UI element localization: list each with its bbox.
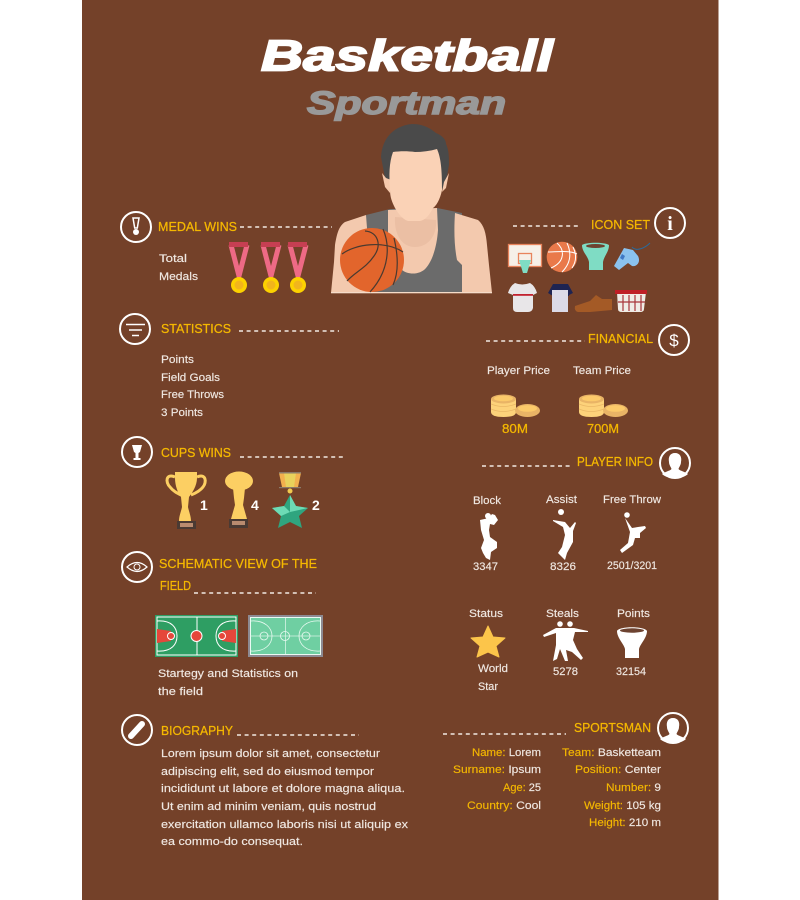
- background panel: [82, 0, 718, 900]
- stat: steals: Steals: [546, 608, 580, 620]
- details: personal: Country: Cool: [467, 800, 541, 812]
- details: team: [562, 747, 661, 829]
- stat: steals: [543, 608, 588, 678]
- icon: whistle: [614, 243, 650, 270]
- text block: lorem ipsum: incididunt ut labore et dolore magna aliqua.: [161, 783, 405, 795]
- icon: medal badge: [121, 212, 151, 242]
- heading: schematic view: SCHEMATIC VIEW OF THE: [159, 557, 317, 571]
- panel: player info: [469, 448, 690, 693]
- panel: statistics: [120, 314, 339, 419]
- values: prices: 700M: [587, 421, 619, 436]
- title: Basketball: [261, 32, 554, 80]
- values: prices: [502, 421, 619, 436]
- text block: lorem ipsum: adipiscing elit, sed do eiusmod tempor: [161, 766, 374, 778]
- panel: medal wins: [121, 212, 332, 293]
- icon: star medal: [272, 472, 308, 528]
- stat: status: Status: [469, 608, 504, 620]
- list: statistics: [161, 354, 225, 419]
- heading: biography: BIOGRAPHY: [161, 724, 234, 738]
- details: team: Height: 210 m: [589, 817, 661, 829]
- icon: coins: [491, 394, 628, 417]
- list: statistics: Free Throws: [161, 389, 225, 401]
- stat: points: 32154: [616, 666, 646, 678]
- stat: block: [473, 495, 502, 573]
- stat: status: World: [478, 663, 508, 675]
- values: prices: 80M: [502, 421, 528, 436]
- stat: points: Points: [617, 608, 651, 620]
- text block: lorem ipsum: Lorem ipsum dolor sit amet, consectetur: [161, 748, 380, 760]
- list: statistics: Field Goals: [161, 372, 221, 384]
- icon: basketball: [547, 242, 577, 272]
- icon: three medals: [229, 242, 307, 293]
- details: team: Team: Basketteam: [562, 747, 661, 759]
- stat: assist: 8326: [550, 561, 576, 573]
- icon: dollar badge: $: [669, 331, 679, 350]
- stat: status: [469, 608, 508, 693]
- text block: lorem ipsum: exercitation ullamco laboris nisi ut aliquip ex: [161, 819, 409, 831]
- heading: cups wins: CUPS WINS: [161, 446, 231, 460]
- panel: financial: [486, 325, 689, 436]
- text: cup count 1: 1: [200, 497, 208, 513]
- text: cup count 4: 4: [251, 497, 259, 513]
- text block: lorem ipsum: ea commo-do consequat.: [161, 836, 303, 848]
- label: total medals: Total: [159, 253, 187, 265]
- details: team: Position: Center: [575, 764, 661, 776]
- icon: basket: [615, 290, 647, 312]
- title: Sportman: [307, 85, 506, 121]
- panel: icon set: [508, 208, 685, 312]
- stat: status: Star: [478, 681, 498, 693]
- player illustration: [331, 124, 492, 293]
- panel: biography: [122, 715, 409, 848]
- icon: sportsman badge: [658, 713, 688, 743]
- stat: assist: Assist: [546, 494, 577, 506]
- heading: sportsman: SPORTSMAN: [574, 721, 651, 735]
- stat: points: [616, 608, 651, 678]
- icon: trophy badge: [122, 437, 152, 467]
- text block: lorem ipsum: [161, 748, 409, 848]
- diagram: pale court: [248, 615, 323, 657]
- label: total medals: Medals: [159, 271, 199, 283]
- icon: navy shirt: [548, 284, 573, 312]
- stat: free throw: [603, 494, 661, 572]
- icon: net: [582, 243, 609, 270]
- caption: strategy: [158, 668, 298, 698]
- panel: sportsman: [443, 713, 688, 829]
- details: personal: Age: 25: [503, 782, 541, 794]
- labels: prices: Team Price: [573, 365, 631, 377]
- details: team: Number: 9: [606, 782, 661, 794]
- details: team: Weight: 105 kg: [584, 800, 661, 812]
- icon: white jersey: [508, 283, 537, 312]
- stat: assist: [546, 494, 577, 573]
- stat: steals: 5278: [553, 666, 578, 678]
- icon: filter badge: [120, 314, 150, 344]
- details: personal: Name: Lorem: [472, 747, 541, 759]
- icon: gold cup: [167, 472, 205, 529]
- diagram: green court: [155, 615, 238, 657]
- stat: block: Block: [473, 495, 502, 507]
- labels: prices: Player Price: [487, 365, 550, 377]
- heading: financial: FINANCIAL: [588, 332, 653, 346]
- heading: icon set: ICON SET: [591, 218, 650, 232]
- title: [261, 32, 554, 121]
- caption: strategy: Startegy and Statistics on: [158, 668, 298, 680]
- heading: player info: PLAYER INFO: [577, 455, 653, 469]
- panel: cups wins: [122, 437, 346, 529]
- icon: info badge: [655, 208, 685, 238]
- list: statistics: Points: [161, 354, 195, 366]
- text: cup count 2: 2: [312, 497, 320, 513]
- caption: strategy: the field: [158, 686, 203, 698]
- icon: shoe: [575, 295, 612, 312]
- icon: dollar badge: [659, 325, 689, 355]
- stat: block: 3347: [473, 561, 498, 573]
- stat: free throw: 2501/3201: [607, 560, 657, 572]
- icon: pencil badge: [122, 715, 152, 745]
- text block: lorem ipsum: Ut enim ad minim veniam, quis nostrud: [161, 801, 376, 813]
- icon: info badge: i: [667, 213, 673, 235]
- icon: backboard: [508, 244, 542, 273]
- details: personal: Surname: Ipsum: [453, 764, 541, 776]
- panel: schematic view of the field: [122, 552, 323, 698]
- icon: eye badge: [122, 552, 152, 582]
- heading: statistics: STATISTICS: [161, 322, 231, 336]
- heading: medal wins: MEDAL WINS: [158, 220, 237, 234]
- heading: schematic view: [159, 557, 317, 593]
- details: personal: [453, 747, 541, 812]
- labels: prices: [487, 365, 631, 377]
- heading: schematic view: FIELD: [160, 579, 191, 593]
- stat: free throw: Free Throw: [603, 494, 661, 506]
- icon: globe trophy: [225, 472, 253, 528]
- icon: player badge: [660, 448, 690, 478]
- label: total medals: [159, 253, 199, 283]
- list: statistics: 3 Points: [161, 407, 204, 419]
